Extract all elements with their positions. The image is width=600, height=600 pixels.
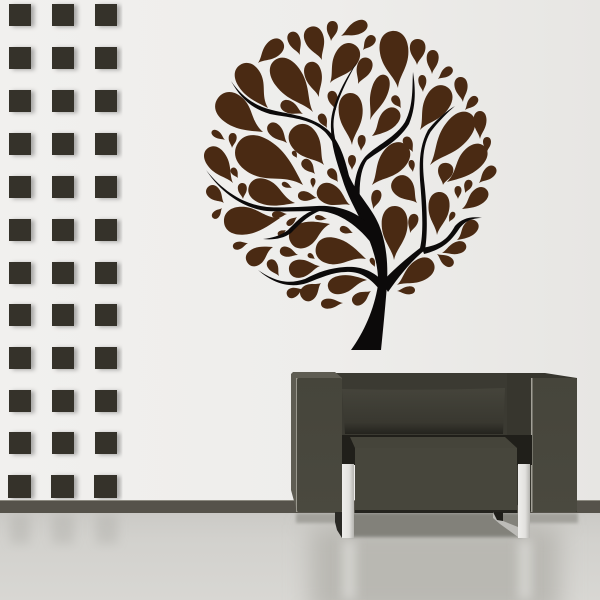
seat under-shadow: [342, 435, 532, 465]
left chrome leg: [342, 464, 354, 538]
baseboard: [0, 500, 600, 513]
tree decal: [200, 17, 499, 350]
left rear leg: [335, 512, 342, 538]
floor: [0, 513, 600, 600]
leaves: [200, 17, 499, 309]
right rear leg: [493, 512, 518, 537]
back cushion: [342, 388, 505, 434]
wall panel: grid of dark square tiles: [8, 4, 117, 498]
seat top: [350, 437, 517, 448]
back rest: [335, 373, 507, 443]
trunk and branches: [206, 62, 482, 350]
armchair: [291, 372, 577, 538]
seat front: [355, 448, 517, 512]
left arm: [291, 372, 342, 512]
right arm: [507, 373, 577, 512]
right chrome leg: [518, 464, 530, 538]
